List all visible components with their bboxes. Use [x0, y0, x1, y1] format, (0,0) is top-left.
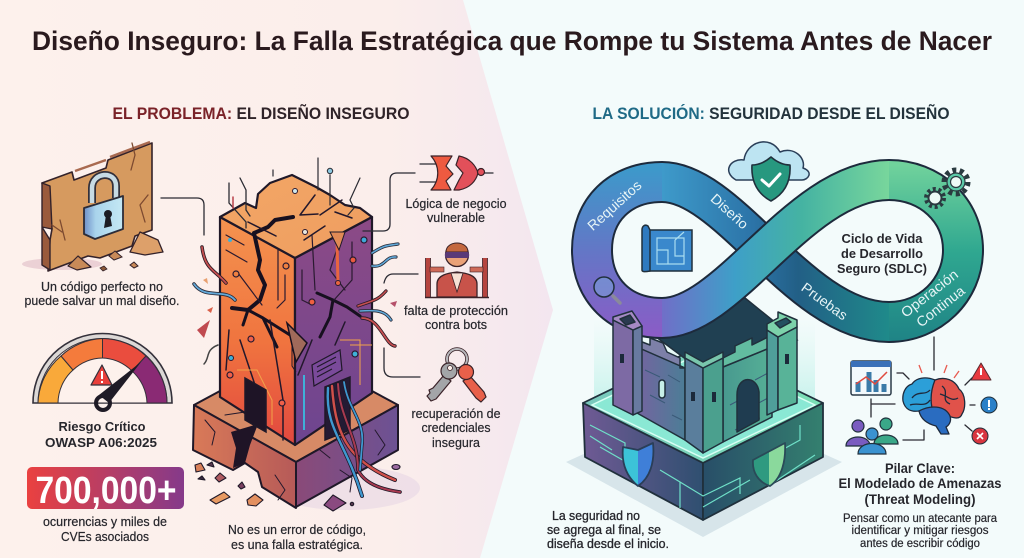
arrow: lock connector [161, 198, 204, 235]
connector [933, 337, 935, 370]
panel: la solución [547, 142, 1002, 551]
chart: risk gauge [33, 334, 172, 410]
text: seguridad [547, 509, 669, 551]
text: ciclo de vida [837, 231, 927, 276]
castle walls [613, 311, 797, 453]
text: ciclo de vida: de Desarrollo [841, 246, 923, 261]
arrow: guard connector [384, 274, 418, 283]
window [659, 380, 665, 398]
platform [583, 345, 823, 520]
door left [245, 378, 266, 432]
text: ocurrencias: CVEs asociados [61, 530, 149, 544]
text: lógica [406, 197, 507, 225]
tower right face [295, 217, 372, 445]
text: no es un error: No es un error de código, [228, 523, 366, 537]
alert ticks [919, 365, 959, 378]
icon: chart window [851, 361, 891, 395]
tower left face [220, 217, 295, 445]
text: seguridad: La seguridad no [552, 509, 640, 523]
circuit traces [226, 188, 372, 430]
text: recuperación [412, 407, 501, 450]
text: seguridad: se agrega al final, se [547, 523, 661, 537]
text: pensar como: antes de escribir código [860, 538, 980, 550]
shield left [623, 443, 653, 486]
rubble [195, 278, 400, 511]
text: pensar como: Pensar como un atecante para [843, 513, 998, 525]
icon: warning triangle [971, 363, 991, 380]
text: pilar clave: Pilar Clave: [885, 461, 955, 476]
ribbon labels: Continua [913, 282, 968, 330]
text: pilar clave: El Modelado de Amenazas [838, 476, 1002, 491]
heading: el problema: EL PROBLEMA: EL DISEÑO INSEGURO [112, 103, 410, 123]
text: lógica: Lógica de negocio [406, 197, 507, 211]
broken base [193, 350, 398, 508]
text: recuperación: credenciales [422, 421, 490, 435]
icon: brain [903, 378, 965, 434]
text: pensar como: identificar y mitigar riesgos [852, 525, 989, 537]
ribbon labels [584, 177, 968, 330]
icon: broken logic gate [420, 156, 493, 190]
icon: blueprint [642, 225, 692, 272]
text: pilar clave: (Threat Modeling) [864, 492, 976, 507]
icon: magnifier [594, 277, 620, 303]
title: Diseño Inseguro: La Falla Estratégica que Rompe tu Sistema Antes de Nacer [32, 26, 992, 56]
icon: info circle [981, 397, 997, 413]
icon: cloud shield [729, 142, 809, 201]
text: riesgo crítico: OWASP A06:2025 [45, 435, 157, 450]
wires [194, 158, 400, 496]
text: pensar como [843, 513, 998, 550]
panel: el problema [22, 142, 508, 552]
front tower [685, 358, 703, 453]
arrows [871, 373, 975, 440]
gate [737, 380, 759, 432]
chart: SDLC infinity ribbon [584, 177, 968, 330]
text: no es un error [228, 523, 366, 552]
battlements [637, 338, 685, 368]
arrow: keys connector [384, 348, 420, 377]
tower top [220, 175, 372, 258]
text: seguridad: diseña desde el inicio. [547, 537, 669, 551]
text: falta [404, 304, 508, 332]
threat modeling diagram [846, 337, 997, 454]
ribbon labels: Pruebas [798, 279, 851, 323]
icon: gears [926, 170, 968, 207]
text: falta: falta de protección [404, 304, 508, 318]
castle interior [640, 298, 797, 372]
right tower [767, 330, 778, 415]
text: código perfecto [24, 280, 180, 308]
ribbon labels: Operación [898, 266, 961, 320]
ribbon labels: Diseño [708, 190, 752, 232]
text: no es un error: es una falla estratégica. [231, 538, 363, 552]
icon: broken wall with padlock [22, 142, 163, 271]
text: recuperación: insegura [432, 436, 480, 450]
text: código perfecto: Un código perfecto no [41, 280, 163, 294]
arrow: gate connector [363, 173, 415, 231]
cracks [226, 195, 360, 440]
text: ocurrencias [43, 515, 167, 544]
illustration: cracked tower [193, 158, 420, 511]
text: código perfecto: puede salvar un mal diseño. [24, 294, 180, 308]
text: ciclo de vida: Ciclo de Vida [842, 231, 923, 246]
wall bricks [645, 370, 768, 430]
icon: keys [427, 349, 486, 402]
icon: security guard [425, 243, 489, 298]
icon: error circle [972, 428, 988, 444]
stat: 700,000+: 700,000+ [36, 470, 176, 512]
text: recuperación: recuperación de [412, 407, 501, 421]
text: ocurrencias: ocurrencias y miles de [43, 515, 167, 529]
text: ciclo de vida: Seguro (SDLC) [837, 261, 927, 276]
left tower [613, 320, 633, 415]
text: riesgo crítico [45, 419, 157, 450]
text: pilar clave [838, 461, 1002, 507]
door right [325, 377, 350, 440]
ribbon labels: Requisitos [584, 177, 645, 234]
shield right [753, 443, 785, 486]
text: lógica: vulnerable [427, 211, 485, 225]
text: riesgo crítico: Riesgo Crítico [58, 419, 146, 434]
illustration: castle on platform [566, 298, 842, 537]
heading: la solución: LA SOLUCIÓN: SEGURIDAD DESDE EL DISEÑO [592, 103, 950, 123]
text: falta: contra bots [425, 318, 487, 332]
icon: people [846, 418, 898, 454]
